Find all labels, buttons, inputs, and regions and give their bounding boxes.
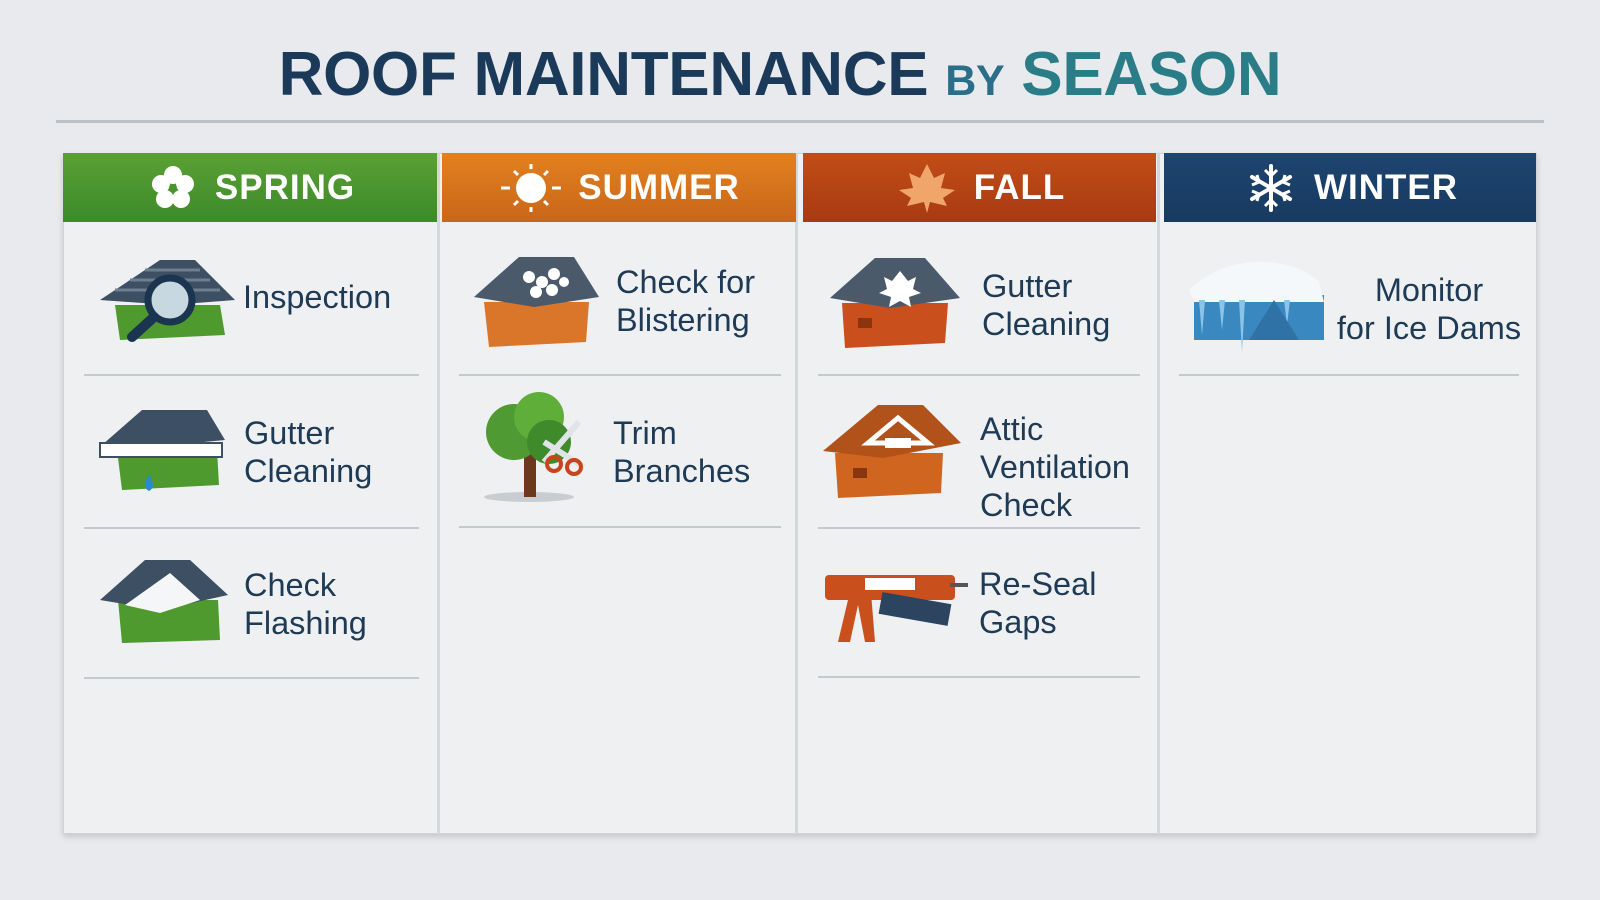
header: winter: WINTER [1314, 168, 1458, 206]
winter item: ice dams: Monitor [1375, 272, 1483, 308]
spring item: check flashing: Check [244, 567, 336, 603]
header: fall: FALL [974, 168, 1065, 206]
fall item: re-seal gaps: Re-Seal [979, 566, 1096, 602]
panel: main board [63, 153, 1537, 834]
winter item: ice dams: for Ice Dams [1337, 310, 1521, 346]
spring item: gutter cleaning [99, 410, 372, 491]
fall item: attic ventilation: Check [980, 487, 1072, 523]
title: ROOF MAINTENANCE BY SEASON [279, 40, 1281, 109]
summer item: trim branches: Trim [613, 415, 677, 451]
spring item: inspection: Inspection [243, 279, 391, 315]
header: spring [63, 153, 437, 222]
header: fall [803, 153, 1156, 222]
header: summer: SUMMER [578, 168, 740, 206]
fall item: attic ventilation [823, 405, 1130, 523]
summer item: trim branches [484, 392, 750, 502]
summer item: blistering: Blistering [616, 302, 750, 338]
fall item: re-seal gaps [825, 566, 1096, 642]
header: spring: SPRING [215, 168, 355, 206]
spring item: check flashing: Flashing [244, 605, 367, 641]
summer item: trim branches: Branches [613, 453, 750, 489]
fall item: gutter cleaning: Cleaning [982, 306, 1110, 342]
fall item: attic ventilation: Attic [980, 411, 1043, 447]
spring item: check flashing [100, 560, 367, 643]
fall item: gutter cleaning [830, 258, 1110, 348]
header: summer [442, 153, 796, 222]
winter item: ice dams [1190, 262, 1521, 352]
spring item: gutter cleaning: Gutter [244, 415, 334, 451]
spring item: gutter cleaning: Cleaning [244, 453, 372, 489]
summer item: blistering [474, 257, 755, 347]
fall item: re-seal gaps: Gaps [979, 604, 1057, 640]
header: winter [1164, 153, 1536, 222]
fall item: gutter cleaning: Gutter [982, 268, 1072, 304]
summer item: blistering: Check for [616, 264, 755, 300]
fall item: attic ventilation: Ventilation [980, 449, 1130, 485]
spring item: inspection [100, 260, 391, 342]
